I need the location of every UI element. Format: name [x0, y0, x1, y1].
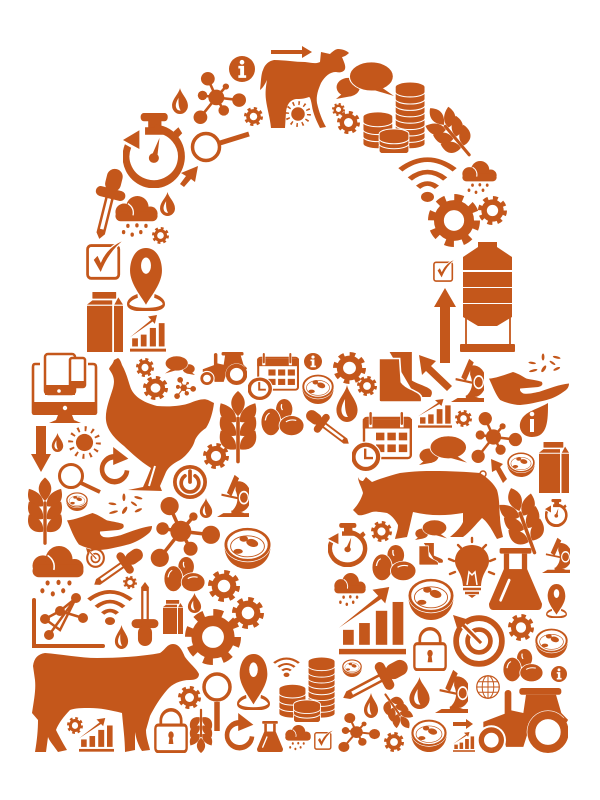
icon: gear — [456, 411, 471, 426]
icon: wifi — [400, 160, 455, 202]
icon: gear — [245, 108, 262, 125]
panel: padlock shackle icons — [85, 46, 515, 363]
icon: growth chart — [453, 732, 475, 752]
icon: checkbox — [88, 240, 125, 278]
icon: gear — [210, 572, 238, 600]
icon: milk carton — [539, 442, 569, 493]
icon: location pin — [238, 654, 269, 709]
icon: right arrow — [271, 46, 312, 58]
icon: drop — [172, 88, 188, 114]
icon: up arrow — [434, 288, 456, 363]
icon: petri dish — [507, 452, 535, 477]
icon: calendar with clock — [247, 353, 299, 400]
icon: scatter chart — [34, 593, 103, 646]
icon: gear — [180, 688, 199, 707]
icon: speech bubbles — [415, 520, 447, 540]
icon: dropper — [132, 582, 158, 646]
icon: refresh — [227, 713, 253, 748]
icon: gear — [137, 359, 153, 376]
icon: info — [304, 353, 322, 370]
icon: coin stacks — [279, 657, 335, 725]
icon: globe — [477, 676, 499, 698]
icon: petri dish — [224, 527, 271, 569]
icon: tractor — [477, 688, 569, 755]
icon: flask — [489, 548, 542, 610]
icon: checkbox — [434, 259, 456, 281]
icon: wifi — [274, 659, 299, 677]
icon: seeds — [528, 353, 561, 373]
icon: growth chart — [79, 718, 114, 752]
icon: speech bubbles — [336, 62, 394, 99]
icon: devices — [32, 354, 97, 423]
icon: growth chart — [130, 315, 166, 352]
icon: tractor — [199, 352, 248, 386]
icon: microscope — [451, 361, 486, 402]
icon: petri dish — [408, 578, 454, 620]
icon: drop — [188, 593, 201, 613]
icon: gear — [385, 733, 403, 751]
icon: milk carton — [163, 600, 183, 634]
icon: calf — [260, 49, 349, 128]
icon: stopwatch — [123, 113, 182, 184]
icon: petri dish — [411, 719, 447, 752]
icon: small gear — [153, 228, 168, 243]
icon: growth chart — [418, 399, 452, 428]
icon: location pin — [547, 584, 566, 617]
icon: large gear — [189, 613, 237, 661]
icon: power button — [173, 465, 207, 499]
icon: rain cloud — [462, 161, 497, 194]
icon: small arrow — [180, 166, 198, 187]
icon: gear — [68, 718, 82, 733]
icon: wifi — [89, 592, 131, 625]
icon: stopwatch — [545, 499, 567, 526]
icon: magnifier — [204, 674, 230, 731]
icon: gear — [510, 616, 532, 639]
icon: sun — [71, 429, 98, 456]
icon: target — [453, 615, 502, 664]
icon: coin stacks — [363, 82, 425, 156]
icon: refresh — [102, 447, 128, 482]
icon: seeds — [108, 493, 143, 515]
icon: microscope — [435, 672, 470, 713]
icon: magnifier — [60, 464, 100, 492]
panel: padlock body lower right — [279, 573, 569, 755]
icon: gear — [234, 599, 262, 627]
icon: eggs — [503, 649, 543, 682]
icon: gear — [145, 378, 166, 398]
icon: right arrow — [453, 719, 473, 729]
icon: down arrow — [31, 426, 51, 472]
icon: gear pair — [333, 104, 358, 132]
panel: padlock body upper right — [301, 352, 572, 610]
icon: dropper — [336, 651, 414, 711]
icon: calendar with clock — [351, 412, 412, 472]
icon: speech bubbles — [419, 436, 467, 465]
icon: wheat — [220, 391, 256, 462]
icon: drop — [160, 192, 175, 216]
icon: gear — [124, 577, 136, 588]
icon: eggs — [164, 557, 205, 592]
icon: large gear — [432, 198, 476, 243]
icon: petri dish — [66, 492, 88, 511]
icon: growth chart — [339, 587, 406, 654]
panel: padlock body upper left — [28, 352, 304, 569]
icon: rain cloud — [115, 196, 158, 237]
icon: microscope — [217, 477, 251, 517]
icon: wheat — [494, 482, 551, 559]
icon: hand — [489, 372, 569, 405]
icon: checkbox — [315, 730, 334, 749]
icon: eggs — [261, 399, 304, 436]
icon: hen — [106, 358, 214, 491]
icon: hand — [67, 513, 152, 550]
icon: dropper — [85, 165, 131, 243]
icon: pig — [353, 471, 503, 539]
icon: target — [86, 548, 104, 567]
icon: wheat — [190, 710, 212, 753]
icon: wheat — [28, 478, 62, 543]
icon: network — [194, 72, 246, 124]
icon: speech bubbles — [165, 356, 195, 375]
icon: drop — [115, 625, 128, 649]
icon: stopwatch — [328, 523, 366, 565]
icon: drop with info — [520, 403, 548, 437]
icon: drop — [200, 498, 212, 518]
icon: gear — [358, 377, 376, 395]
icon: info — [551, 666, 567, 682]
icon: gear — [480, 198, 505, 223]
icon: magnifier — [192, 134, 249, 160]
icon: gear — [372, 522, 391, 541]
icon: lock — [414, 629, 446, 670]
icon: microscope — [542, 539, 572, 573]
icon: network — [472, 412, 522, 463]
icon: location pin — [128, 248, 164, 310]
icon: sun — [287, 103, 309, 125]
icon: wheat — [377, 688, 418, 734]
icon: petri dish — [342, 659, 362, 677]
icon: petri dish — [302, 374, 334, 404]
icon: rain cloud — [334, 573, 366, 606]
icon: drop — [409, 677, 430, 709]
icon: lock — [155, 710, 187, 752]
icon: boots — [419, 543, 443, 565]
icon: network — [174, 377, 196, 399]
icon: light bulb — [449, 538, 495, 598]
icon: drop — [52, 433, 63, 452]
icon: dropper — [301, 404, 355, 452]
icon: boots — [379, 352, 432, 402]
icon: info — [229, 56, 255, 82]
panel: padlock body lower left — [32, 541, 299, 753]
icon: petri dish — [535, 628, 568, 658]
icon: rain cloud — [33, 546, 83, 596]
icon: network — [151, 497, 220, 567]
icon: silo — [460, 242, 515, 352]
icon: cow — [32, 644, 199, 752]
icon: gear — [205, 445, 227, 467]
icon: eggs — [372, 545, 416, 581]
icon: drop — [336, 385, 358, 422]
icon: gear — [335, 354, 364, 382]
icon: flask — [257, 721, 283, 752]
icon: drop — [364, 693, 378, 718]
icon: milk carton — [87, 292, 123, 352]
icon: dropper — [87, 541, 149, 595]
icon: network — [338, 713, 380, 752]
icon: wheat — [418, 98, 481, 165]
icon: up-left arrow — [419, 355, 452, 391]
icon: rain cloud — [285, 725, 311, 750]
icon: arrow — [491, 459, 507, 483]
